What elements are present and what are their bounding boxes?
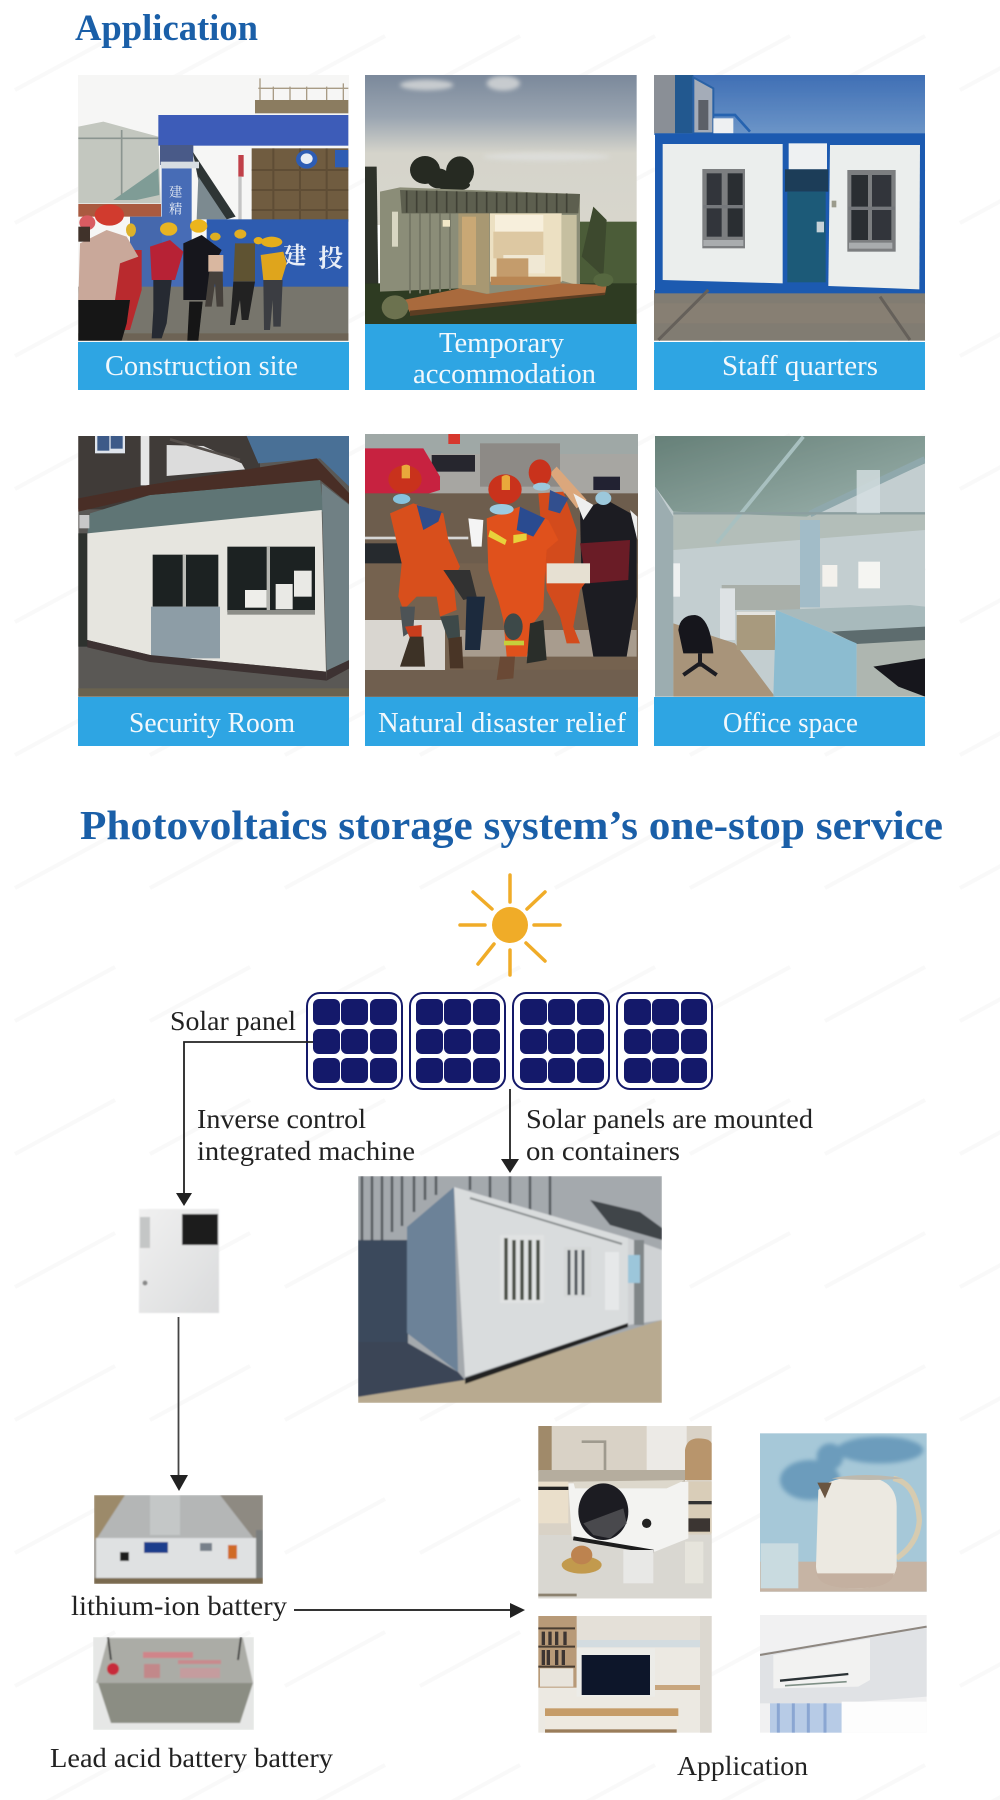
photo: rescue workers in orange	[365, 434, 638, 697]
photo: office interior	[655, 436, 925, 697]
photo: inverter control machine	[139, 1209, 219, 1313]
caption band	[654, 342, 925, 390]
label: Inverse control integrated machine: Inverse control	[197, 1103, 366, 1134]
caption: Temporary accommodation: Temporary	[439, 328, 564, 359]
panel: office space card	[654, 436, 925, 746]
label: Solar panel: Solar panel	[170, 1005, 296, 1036]
arrow: solar panel to container	[501, 1089, 519, 1173]
group: application photos	[538, 1426, 927, 1733]
label: Solar panels are mounted on containers: Solar panels are mounted	[526, 1103, 813, 1134]
photo: security room building	[78, 436, 349, 697]
label: Inverse control integrated machine: integrated machine	[197, 1135, 415, 1166]
solar panel 3	[513, 993, 609, 1089]
panel: construction site card	[70, 70, 370, 390]
photo: white and blue container	[654, 75, 925, 341]
photo: dishwasher in kitchen	[538, 1426, 712, 1598]
photo: construction site: 精	[169, 200, 182, 216]
photo: TV in living room	[538, 1616, 712, 1733]
title: Application: Application	[75, 8, 258, 49]
caption: Construction site: Construction site	[105, 351, 298, 382]
caption band	[78, 342, 349, 390]
photo: construction site: 建	[169, 184, 182, 200]
caption: Staff quarters: Staff quarters	[722, 351, 878, 382]
caption band	[654, 697, 925, 746]
label: lithium-ion battery: lithium-ion battery	[71, 1590, 287, 1621]
caption band	[78, 697, 349, 746]
caption band	[365, 697, 638, 746]
icon: sun	[460, 875, 560, 975]
photo: construction site: 建	[283, 242, 307, 269]
caption: Office space: Office space	[723, 708, 858, 739]
photo: lithium-ion battery	[94, 1495, 263, 1584]
solar panel 1	[307, 993, 402, 1089]
photo: lead acid battery	[93, 1637, 254, 1730]
panel: staff quarters card	[654, 75, 925, 390]
photo: container with solar panels	[358, 1176, 662, 1403]
arrow: solar panel to inverter	[176, 1042, 313, 1206]
photo: container cabin at dusk	[365, 75, 637, 324]
caption: Security Room: Security Room	[129, 708, 295, 739]
label: Application: Application	[677, 1750, 808, 1781]
photo: white kettle	[760, 1433, 927, 1592]
arrow: inverter to lithium battery	[170, 1317, 188, 1491]
label: Lead acid battery battery: Lead acid battery battery	[50, 1742, 333, 1773]
arrow: battery to application	[294, 1603, 525, 1618]
panel: natural disaster relief card	[360, 430, 660, 746]
title: Photovoltaics storage system's one-stop service: Photovoltaics storage system’s one-stop service	[80, 802, 943, 848]
label: Solar panels are mounted on containers: on containers	[526, 1135, 680, 1166]
caption: Natural disaster relief: Natural disaster relief	[378, 708, 627, 739]
photo: construction site: 投	[318, 245, 343, 273]
icon: solar panel array	[307, 993, 712, 1089]
photo: air conditioner	[760, 1615, 927, 1733]
panel: temporary accommodation card	[365, 75, 637, 390]
panel: security room card	[78, 436, 349, 746]
caption band	[365, 324, 637, 390]
solar panel 4	[617, 993, 712, 1089]
caption: Temporary accommodation: accommodation	[413, 359, 596, 390]
solar panel 2	[410, 993, 505, 1089]
photo: construction site	[78, 75, 349, 342]
